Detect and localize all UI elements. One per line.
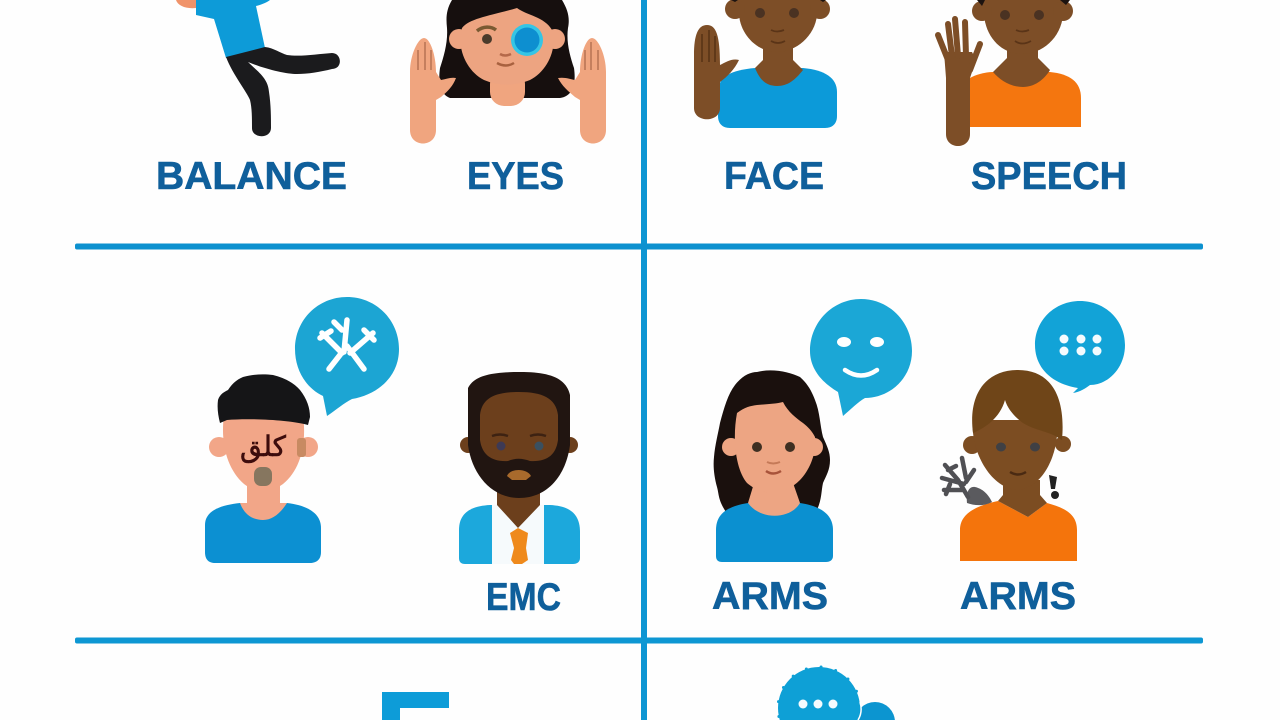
right raised hand <box>558 38 606 144</box>
figure: eyes <box>410 0 606 144</box>
left raised hand <box>410 38 456 144</box>
bottom right chat bubbles <box>778 667 895 720</box>
speech bubble with dots <box>1035 301 1125 393</box>
label: face: FACE <box>724 155 824 198</box>
grey branch creature <box>942 458 992 505</box>
figure: man with speech bubble <box>205 297 399 563</box>
label: balance: BALANCE <box>156 155 347 198</box>
label: speech: SPEECH <box>971 155 1127 198</box>
garbled face marks: كلق <box>240 430 287 463</box>
figure: speech <box>938 0 1081 146</box>
label: arms right: ARMS <box>960 575 1076 618</box>
bottom left letter shape <box>382 692 449 720</box>
label: arms left: ARMS <box>712 575 828 618</box>
label: eyes: EYES <box>467 155 564 198</box>
figure: face <box>694 0 837 128</box>
figure: woman with smiling bubble <box>714 299 912 562</box>
tie <box>510 528 528 564</box>
figure: woman with dots bubble <box>942 301 1125 561</box>
speech bubble with smile <box>810 299 912 416</box>
figure: bearded man with tie <box>459 372 580 564</box>
label: garbled word: EMC <box>486 576 561 619</box>
figure: balance <box>176 0 340 136</box>
exclamation mark <box>1049 475 1059 499</box>
icon: blue gem over eye <box>511 24 543 56</box>
speech bubble with symbol <box>295 297 399 416</box>
raised hand <box>694 25 739 119</box>
waving hand <box>938 19 980 146</box>
